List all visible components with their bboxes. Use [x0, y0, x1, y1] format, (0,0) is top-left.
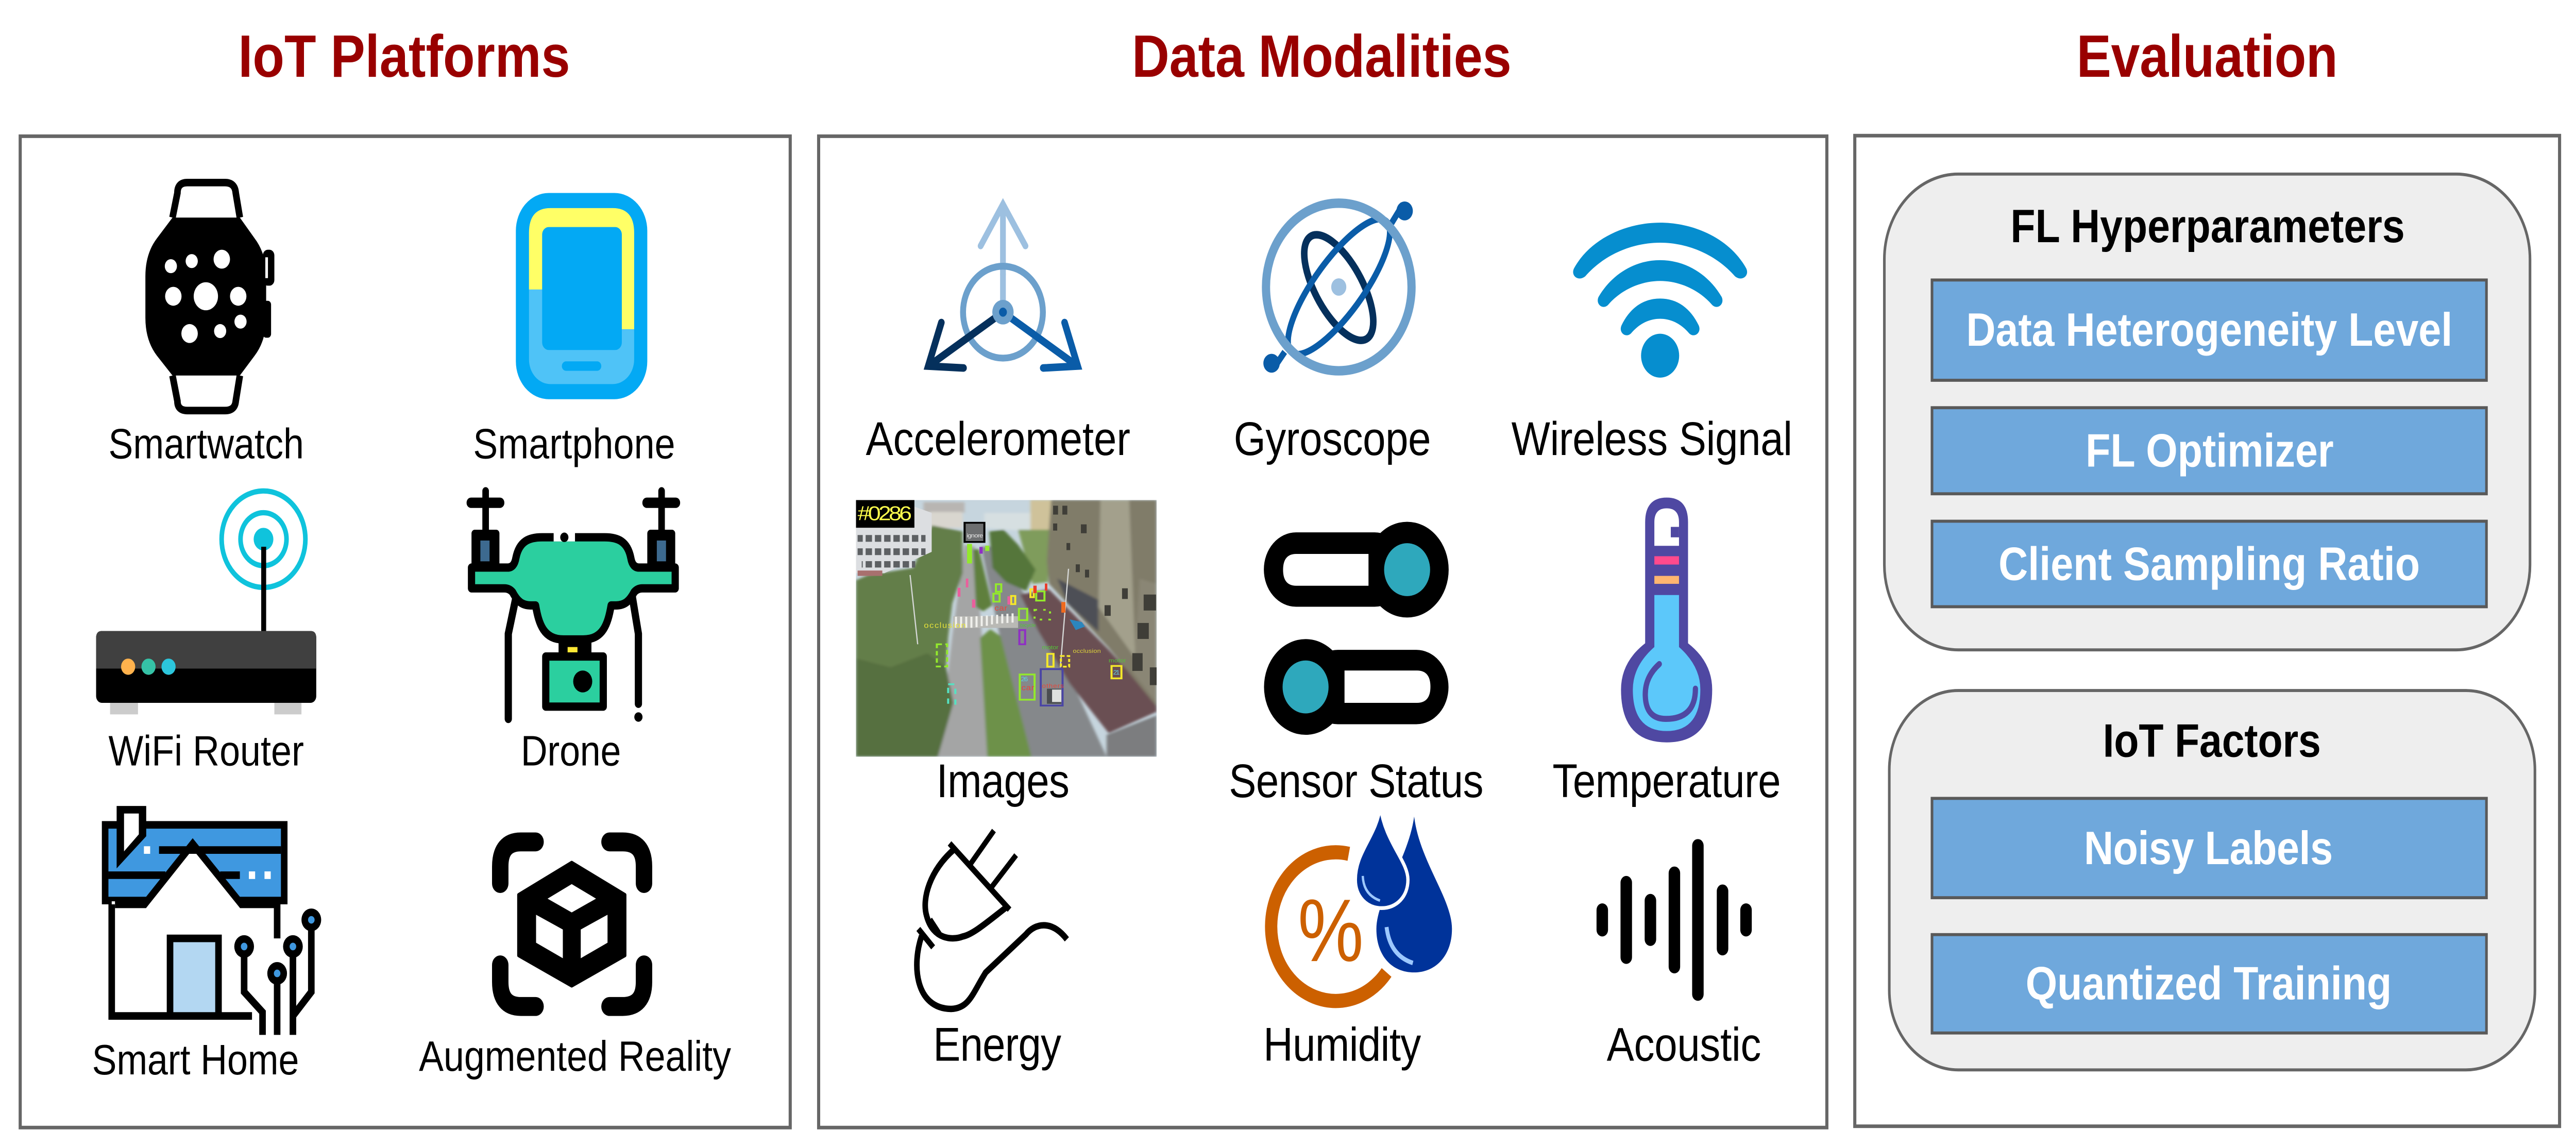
image: aerial street photo with detection boxes [856, 500, 1157, 757]
icon: wireless signal [1573, 223, 1747, 378]
label: Images: Images [937, 755, 1070, 807]
icon: smartphone [516, 193, 647, 399]
icon: drone [467, 487, 680, 722]
overlay: detection labels: car [994, 604, 1007, 613]
item: FL Optimizer [1932, 408, 2486, 494]
group: IoT Factors [1889, 690, 2535, 1070]
overlay: detection labels: 26 [1021, 676, 1028, 683]
label: Temperature: Temperature [1552, 755, 1781, 807]
label: Drone: Drone [521, 728, 621, 775]
overlay: detection labels: ignore [967, 532, 984, 539]
title: IoT Platforms: IoT Platforms [238, 23, 570, 90]
label: Humidity: Humidity [1263, 1018, 1421, 1071]
icon: sensor status toggles [1264, 522, 1449, 735]
icon: thermometer [1621, 498, 1712, 743]
item: Noisy Labels [1932, 798, 2486, 898]
overlay: detection labels: car [1022, 684, 1034, 692]
icon: energy plug [917, 831, 1067, 1009]
group: FL Hyperparameters [1885, 174, 2530, 650]
overlay: detection labels: occlusion [924, 622, 966, 630]
label: Sensor Status: Sensor Status [1229, 755, 1483, 807]
icon: acoustic waveform [1602, 846, 1746, 994]
label: Wireless Signal: Wireless Signal [1512, 413, 1792, 465]
icon: WiFi router [96, 491, 316, 714]
item: Client Sampling Ratio: Client Sampling Ratio [1998, 538, 2420, 591]
label: WiFi Router: WiFi Router [108, 728, 304, 775]
label: Accelerometer: Accelerometer [866, 413, 1130, 465]
item: Data Heterogeneity Level: Data Heterogeneity Level [1966, 304, 2452, 356]
icon: humidity: % [1298, 881, 1364, 981]
heading: IoT Factors: IoT Factors [2103, 714, 2321, 767]
item: Quantized Training [1932, 935, 2486, 1033]
overlay: detection labels: others [1042, 683, 1064, 689]
item: Data Heterogeneity Level [1932, 280, 2486, 380]
item: FL Optimizer: FL Optimizer [2086, 425, 2334, 477]
label: Smartphone: Smartphone [473, 420, 675, 468]
panel: Evaluation [1855, 136, 2560, 1126]
icon: humidity [1271, 806, 1452, 1001]
overlay: detection labels [924, 532, 1126, 692]
label: Augmented Reality: Augmented Reality [419, 1033, 731, 1080]
icon: gyroscope [1263, 201, 1413, 373]
title: Data Modalities: Data Modalities [1132, 23, 1512, 90]
panel: IoT Platforms [20, 136, 790, 1127]
label: Smart Home: Smart Home [92, 1036, 299, 1084]
item: Quantized Training: Quantized Training [2026, 958, 2392, 1010]
icon: smart home [105, 806, 321, 1035]
title: Evaluation: Evaluation [2077, 23, 2338, 90]
icon: smartwatch [145, 182, 275, 411]
overlay: detection labels: motor [1042, 644, 1058, 651]
overlay: detection labels: 21 [1113, 669, 1120, 676]
overlay: frame number: #0286 [858, 502, 912, 525]
item: Noisy Labels: Noisy Labels [2084, 822, 2333, 874]
overlay: detection labels: occlusion [1073, 648, 1101, 654]
item: Client Sampling Ratio [1932, 521, 2486, 606]
icon: augmented reality [500, 842, 644, 1006]
label: Gyroscope: Gyroscope [1234, 413, 1431, 465]
label: Smartwatch: Smartwatch [108, 420, 304, 468]
panel: Data Modalities [819, 136, 1827, 1127]
overlay: detection labels: motor [1109, 657, 1126, 664]
icon: accelerometer [928, 205, 1078, 368]
overlay: detection labels: bicycle [1020, 623, 1036, 628]
label: Energy: Energy [933, 1018, 1061, 1071]
heading: FL Hyperparameters: FL Hyperparameters [2010, 200, 2405, 252]
label: Acoustic: Acoustic [1607, 1018, 1761, 1071]
